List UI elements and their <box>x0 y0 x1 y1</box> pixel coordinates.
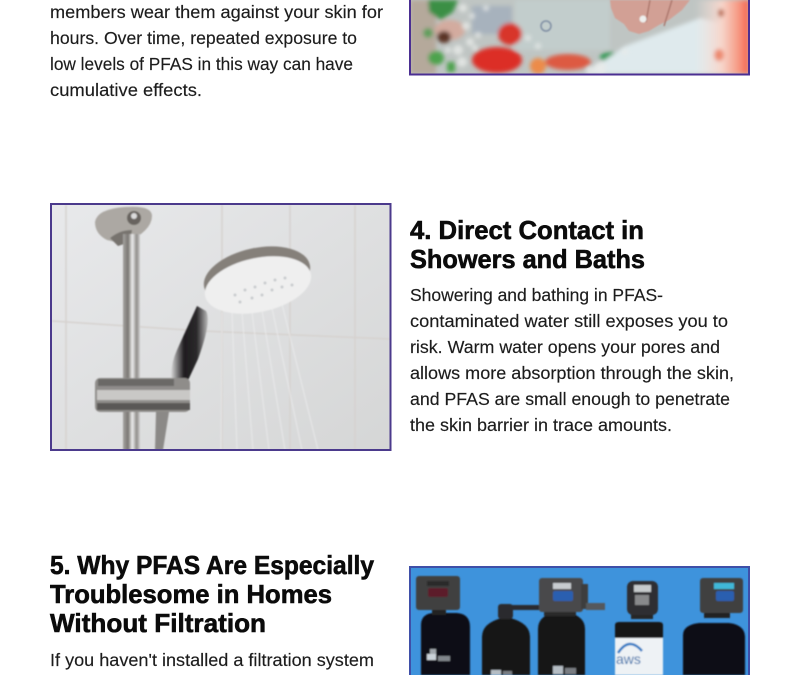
text block: section 5 body: If you haven't installed a filtration system <box>50 650 374 670</box>
text block: section 4 body: risk. Warm water opens your pores and <box>410 337 720 357</box>
heading: section 5 <box>50 550 375 638</box>
spray <box>221 304 318 450</box>
text block: section 4 body: allows more absorption through the skin, <box>410 363 734 383</box>
text block: section 4 body: Showering and bathing in PFAS- <box>410 285 663 305</box>
text block: laundry exposure conclusion: low levels of PFAS in this way can have <box>50 54 353 74</box>
tank 5 <box>683 623 745 675</box>
image: water filtration systems: aws <box>616 651 641 667</box>
heading: section 4: 4. Direct Contact in <box>410 215 644 245</box>
text block: laundry exposure conclusion <box>50 2 383 100</box>
image: shower head on rail <box>51 204 390 450</box>
foam speckles <box>444 3 603 74</box>
text block: section 4 body <box>410 285 734 435</box>
text block: section 4 body: contaminated water still exposes you to <box>410 311 728 331</box>
text block: section 4 body: and PFAS are small enough to penetrate <box>410 389 730 409</box>
heading: section 5: Without Filtration <box>50 608 266 638</box>
heading: section 4 <box>410 215 645 274</box>
tank 3 <box>538 613 585 675</box>
text block: laundry exposure conclusion: hours. Over time, repeated exposure to <box>50 28 357 48</box>
image: water filtration systems <box>410 567 749 675</box>
text block: section 4 body: the skin barrier in trace amounts. <box>410 415 672 435</box>
logos <box>427 649 576 675</box>
tank 4 <box>614 621 664 639</box>
heading: section 5: 5. Why PFAS Are Especially <box>50 550 375 580</box>
tank 2 <box>482 618 530 675</box>
image: washing clothes in water <box>410 0 749 74</box>
tank 1 <box>421 613 470 675</box>
heading: section 4: Showers and Baths <box>410 244 645 274</box>
text block: laundry exposure conclusion: members wear them against your skin for <box>50 2 383 22</box>
text block: laundry exposure conclusion: cumulative effects. <box>50 80 202 100</box>
heading: section 5: Troublesome in Homes <box>50 579 332 609</box>
